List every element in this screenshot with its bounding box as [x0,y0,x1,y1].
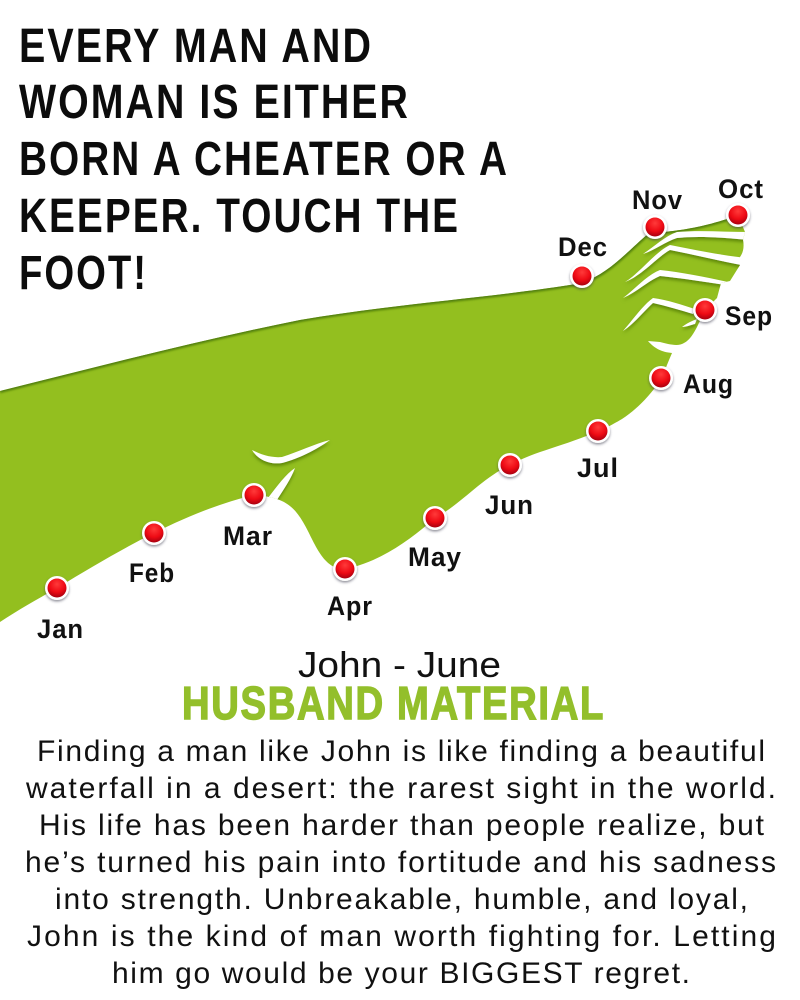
marker: Jan [45,576,69,600]
month labels: Aug [683,369,734,399]
marker: May [423,506,447,530]
description text: John is the kind of man worth fighting for. Letting [27,920,776,953]
marker: Aug [649,366,673,390]
month labels: Jan [37,614,84,644]
description text: him go would be your BIGGEST regret. [112,957,690,990]
foot shape [0,215,745,622]
ankle crease [252,440,330,503]
title: EVERY MAN AND [19,20,373,73]
month labels [37,174,773,644]
marker: Dec [570,264,594,288]
result heading: HUSBAND MATERIAL [182,677,605,729]
marker: Jun [498,453,522,477]
month labels: Oct [718,174,764,204]
marker: Jul [586,419,610,443]
month labels: May [408,542,462,572]
description text: Finding a man like John is like finding a beautiful [37,735,765,768]
description text: His life has been harder than people realize, but [39,809,765,842]
month labels: Feb [129,558,175,588]
date range heading: John - June [298,644,501,685]
description text [25,735,776,990]
foot illustration [0,215,750,622]
marker: Oct [726,203,750,227]
description text: into strength. Unbreakable, humble, and loyal, [55,883,748,916]
title [19,20,509,300]
description text: he’s turned his pain into fortitude and his sadness [25,846,776,879]
month labels: Sep [725,301,773,331]
toe lines [623,231,750,331]
title: KEEPER. TOUCH THE [19,190,460,243]
title: BORN A CHEATER OR A [19,133,509,186]
description text: waterfall in a desert: the rarest sight in the world. [25,772,776,805]
month labels: Nov [632,185,683,215]
month labels: Apr [327,591,373,621]
title: WOMAN IS EITHER [19,76,410,129]
month labels: Dec [558,232,608,262]
month markers [45,203,750,600]
month labels: Mar [223,521,273,551]
marker: Mar [242,483,266,507]
marker: Apr [333,557,357,581]
marker: Nov [643,215,667,239]
title: FOOT! [19,247,148,300]
month labels: Jun [485,490,534,520]
marker: Feb [142,521,166,545]
month labels: Jul [577,453,619,483]
foot top edge shading [0,219,727,391]
marker: Sep [693,298,717,322]
